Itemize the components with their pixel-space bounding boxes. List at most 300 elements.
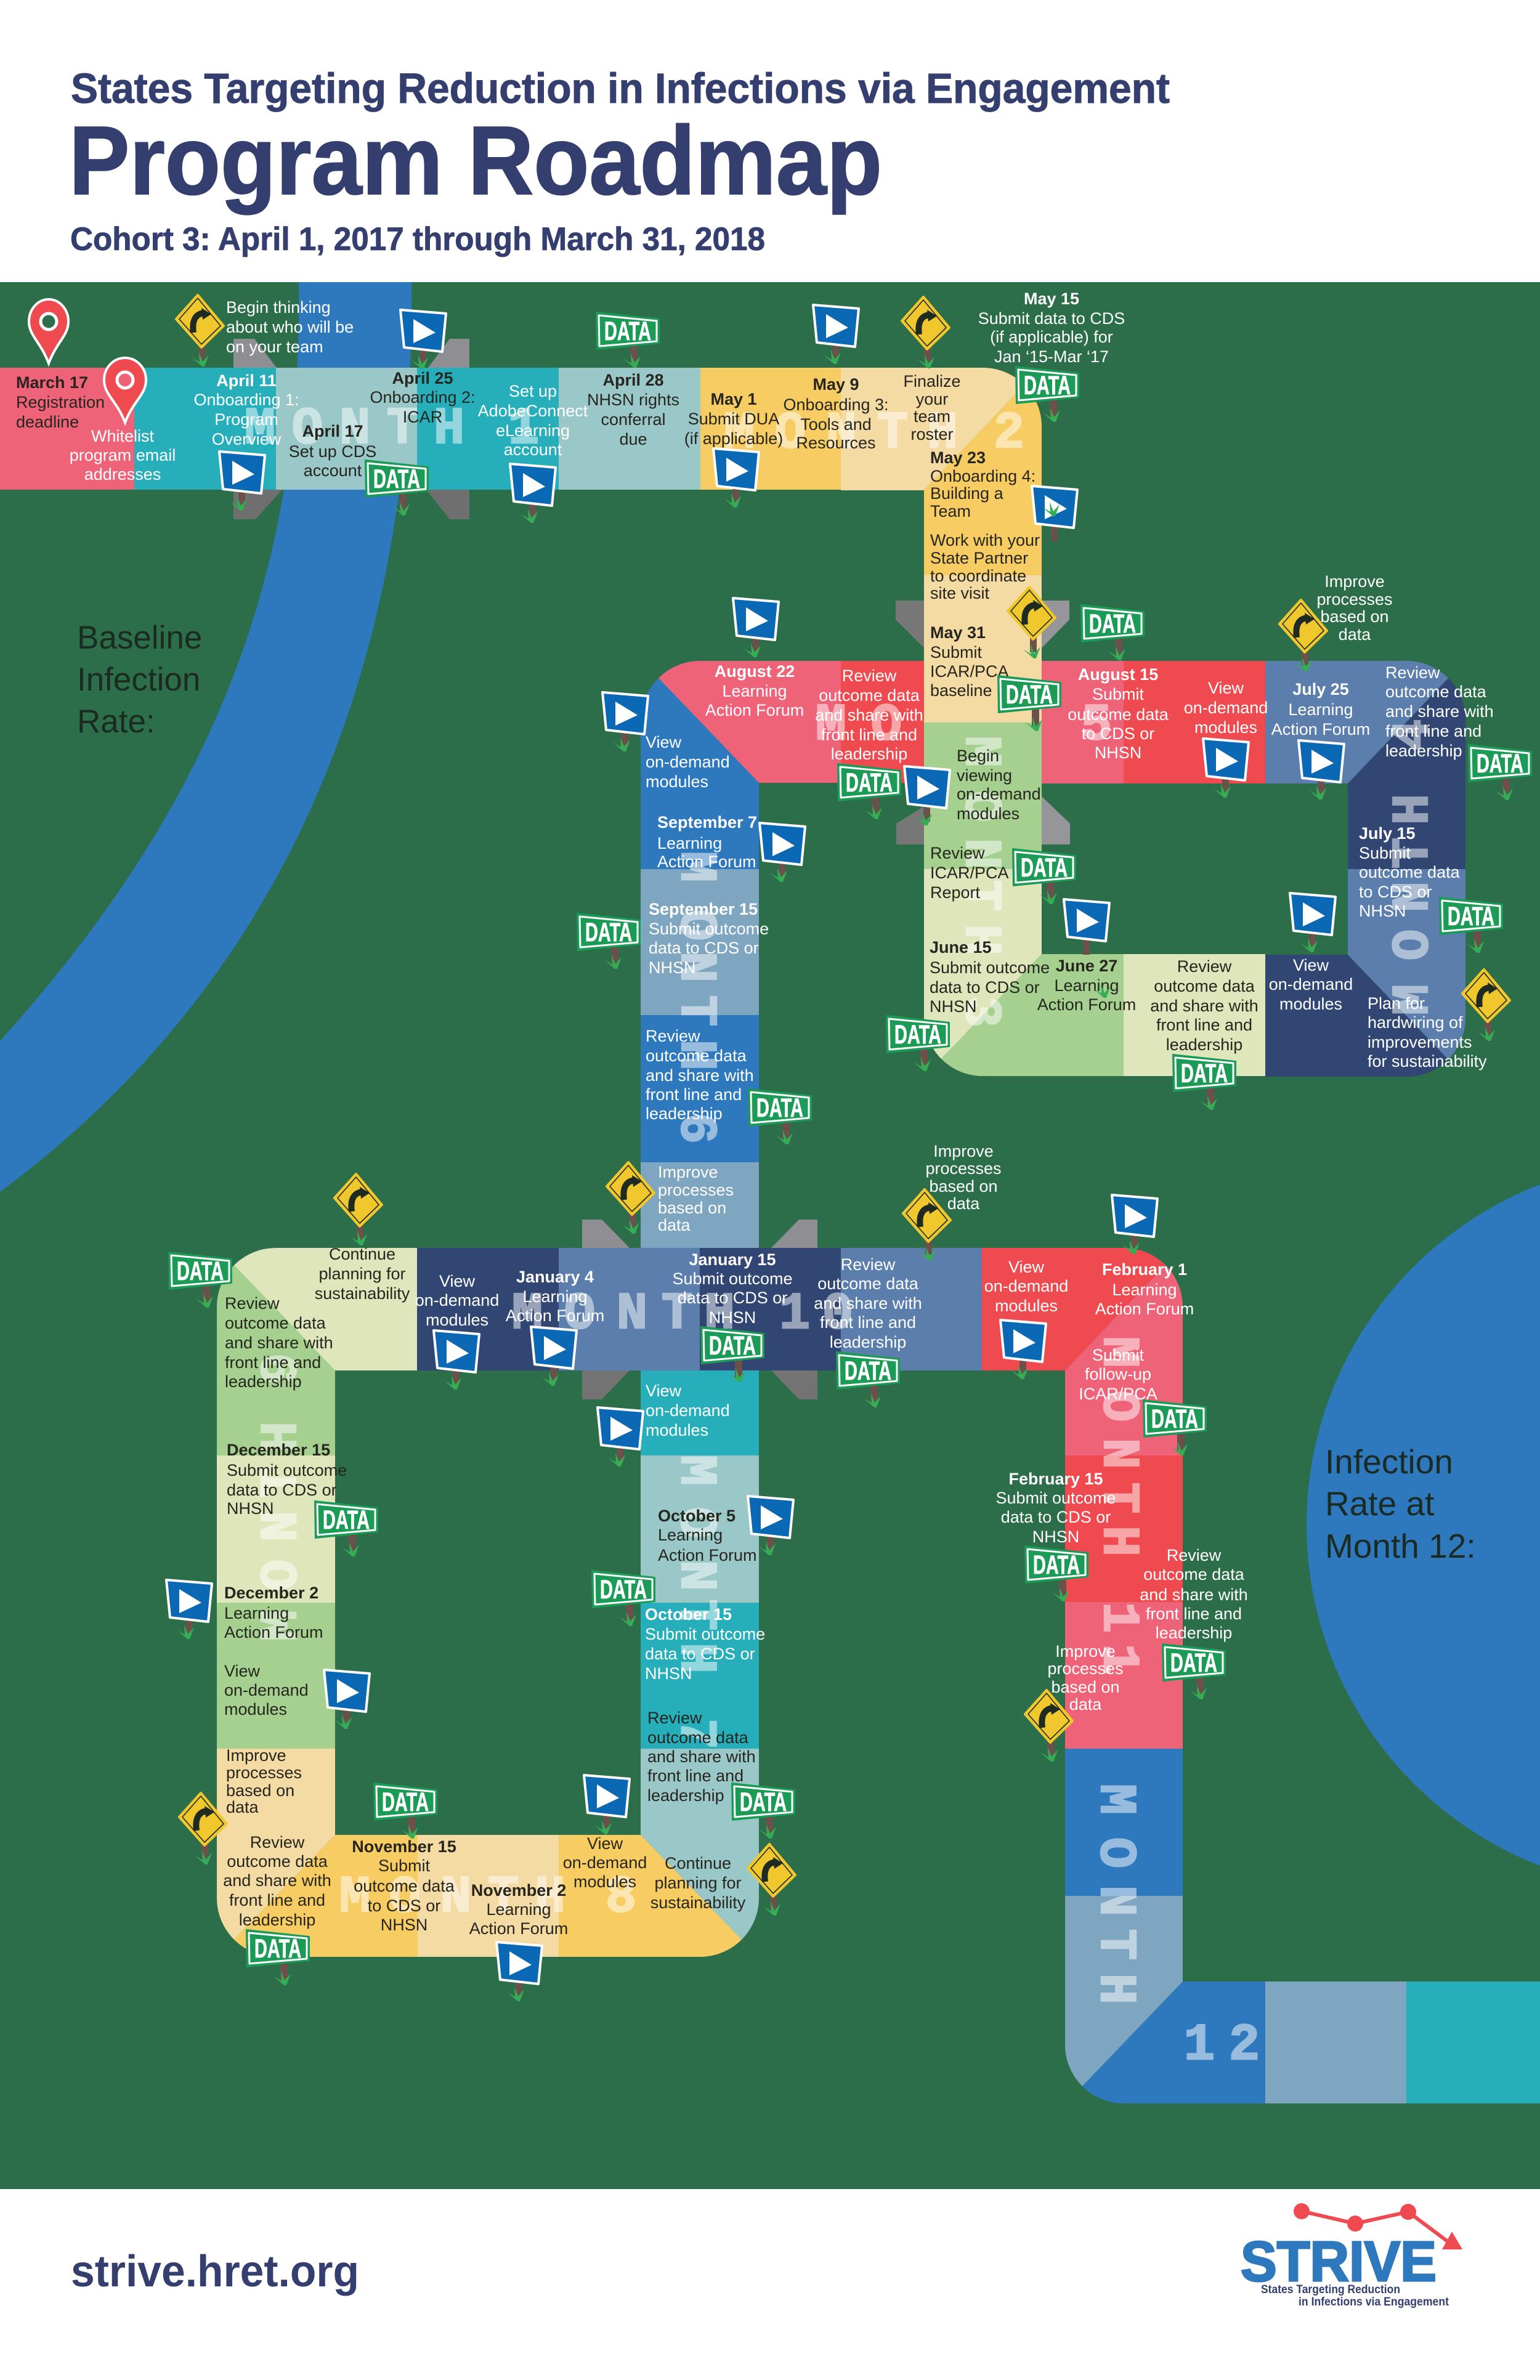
step: May 23: State Partner	[930, 549, 1028, 567]
step: improve processes February: Improve	[1055, 1642, 1116, 1661]
icon: data sign 6	[1469, 745, 1531, 800]
step: improve processes January: data	[947, 1194, 980, 1213]
icon: data sign 15: DATA	[709, 1331, 756, 1361]
river: baseline arc	[0, 282, 411, 1192]
step: review June: leadership	[1166, 1035, 1242, 1054]
step: view modules August: modules	[1194, 718, 1257, 737]
step: improve processes July: processes	[1316, 590, 1393, 609]
label: month 3: MONTH3	[950, 736, 1009, 1027]
label: month 10: MONTH10	[512, 1285, 853, 1344]
step: continue planning October: Continue	[665, 1854, 731, 1872]
step: January 4: Learning	[522, 1287, 588, 1306]
step: May 23: Team	[930, 502, 971, 520]
step: October 15: Submit outcome	[645, 1625, 765, 1643]
step: improve processes July: based on	[1320, 607, 1389, 626]
step: review June: front line and	[1156, 1016, 1252, 1034]
step: view modules February: on-demand	[984, 1277, 1068, 1295]
step: review December: front line and	[225, 1353, 321, 1372]
step: March 17: deadline	[16, 413, 79, 431]
step: July 15: July 15	[1359, 824, 1416, 843]
text: infection rate at month 12: Rate at	[1325, 1484, 1434, 1523]
step: review February: front line and	[1146, 1605, 1242, 1623]
icon: data sign 22	[374, 1783, 437, 1839]
step: view modules October: on-demand	[646, 1401, 730, 1420]
step: November 2: Action Forum	[469, 1919, 568, 1938]
step: March 17: Registration	[16, 393, 105, 411]
step: view modules November: on-demand	[563, 1853, 647, 1872]
step: April 17: Set up CDS	[289, 442, 376, 461]
step: review September: leadership	[646, 1104, 723, 1123]
step: June 15: NHSN	[930, 997, 977, 1016]
step: January 4: January 4	[516, 1268, 594, 1286]
step: July 15: outcome data	[1359, 863, 1461, 881]
step: July 25: July 25	[1292, 680, 1349, 698]
step: January 15: data to CDS or	[678, 1289, 787, 1307]
step: begin thinking: on your team	[226, 338, 323, 356]
text: infection rate at month 12: Month 12:	[1325, 1527, 1476, 1565]
step: review report: Report	[930, 883, 981, 902]
step: whitelist: Whitelist	[91, 427, 155, 445]
step: improve processes September: processes	[658, 1181, 734, 1199]
footer: website url: strive.hret.org	[71, 2247, 359, 2296]
step: September 15: Submit outcome	[649, 920, 769, 938]
text: baseline infection rate: Infection	[77, 662, 200, 698]
step: May 9: Tools and	[800, 415, 872, 434]
step: improve processes November: Improve	[226, 1746, 286, 1765]
step: April 28: conferral	[601, 410, 666, 429]
step: May 9: May 9	[813, 375, 859, 394]
step: December 15: Submit outcome	[227, 1461, 347, 1479]
logo tagline: States Targeting Reduction	[1261, 2283, 1400, 2296]
step: February 15: Submit outcome	[995, 1489, 1116, 1507]
icon: data sign 21	[1162, 1644, 1225, 1699]
icon: data sign 14	[169, 1252, 232, 1308]
icon: data sign 14: DATA	[177, 1257, 224, 1286]
step: review report: ICAR/PCA	[930, 864, 1009, 882]
step: December 15: data to CDS or	[227, 1481, 337, 1499]
step: continue planning October: sustainability	[650, 1893, 746, 1912]
step: improve processes November: data	[226, 1798, 259, 1816]
step: review July: outcome data	[1385, 682, 1487, 701]
icon: data sign 9	[1440, 897, 1502, 953]
step: review October: outcome data	[647, 1728, 749, 1747]
step: July 25: Learning	[1288, 700, 1353, 719]
label: month 9: MONTH9	[253, 1353, 312, 1641]
step: plan for hardwiring: for sustainability	[1368, 1052, 1487, 1071]
icon: data sign 4: DATA	[1006, 680, 1053, 710]
step: improve processes February: based on	[1051, 1678, 1120, 1696]
step: review January: leadership	[830, 1333, 906, 1351]
step: May 1: May 1	[710, 390, 757, 408]
step: whitelist: addresses	[84, 465, 161, 484]
step: review November: and share with	[223, 1871, 331, 1890]
icon: data sign 21: DATA	[1170, 1648, 1217, 1678]
step: May 23: Onboarding 4:	[930, 467, 1035, 485]
step: view modules November: modules	[573, 1872, 636, 1891]
step: July 15: to CDS or	[1359, 883, 1432, 901]
step: view modules February: View	[1008, 1258, 1045, 1276]
step: April 11: Overview	[212, 430, 282, 448]
label: month 6: MONTH6	[666, 851, 724, 1144]
icon: data sign 4	[998, 676, 1061, 731]
step: May 15: May 15	[1024, 289, 1079, 308]
step: review October: front line and	[647, 1767, 744, 1785]
icon: data sign 24: DATA	[254, 1934, 301, 1964]
icon: data sign 12	[1173, 1054, 1236, 1110]
step: review December: leadership	[225, 1372, 302, 1391]
step: review October: and share with	[647, 1747, 756, 1766]
text: infection rate at month 12: Infection	[1325, 1443, 1453, 1481]
step: June 15: June 15	[930, 938, 992, 957]
step: April 25: April 25	[392, 369, 453, 387]
step: review November: outcome data	[227, 1852, 328, 1871]
step: October 5: October 5	[658, 1507, 736, 1525]
step: review November: Review	[250, 1833, 305, 1852]
icon: data sign 15	[701, 1327, 764, 1382]
step: December 2: Action Forum	[224, 1623, 323, 1641]
step: continue planning October: planning for	[654, 1874, 742, 1892]
step: November 15: to CDS or	[368, 1896, 440, 1915]
step: August 22: August 22	[715, 662, 795, 681]
step: review January: Review	[841, 1255, 896, 1274]
icon: location pin whitelist	[104, 358, 146, 423]
label: month 11: MONTH11	[1088, 1337, 1147, 1675]
icon: data sign 20: DATA	[1033, 1550, 1080, 1580]
step: review July: and share with	[1385, 702, 1494, 721]
step: May 15: Submit data to CDS	[978, 309, 1125, 328]
step: review August: Review	[842, 666, 897, 685]
icon: data sign 24	[246, 1930, 309, 1985]
step: April 11: April 11	[216, 371, 277, 390]
step: June 27: Action Forum	[1037, 995, 1136, 1014]
icon: data sign 23	[732, 1783, 795, 1839]
step: continue planning January: sustainability	[315, 1284, 410, 1303]
icon: data sign 16: DATA	[845, 1356, 891, 1386]
step: May 9: Onboarding 3:	[783, 395, 889, 414]
step: May 23: May 23	[930, 448, 986, 467]
step: June 27: June 27	[1056, 957, 1117, 975]
step: improve processes July: Improve	[1324, 572, 1385, 591]
icon: data sign 1: DATA	[373, 464, 420, 494]
step: September 15: September 15	[649, 900, 758, 918]
label: month 12 number: 12	[1184, 2017, 1260, 2075]
logo tagline: in Infections via Engagement	[1299, 2296, 1449, 2309]
step: review February: leadership	[1156, 1624, 1232, 1642]
step: review August: and share with	[815, 706, 923, 724]
step: review June: outcome data	[1154, 977, 1255, 995]
step: view modules August: on-demand	[1184, 698, 1268, 717]
step: whitelist: program email	[70, 446, 176, 464]
step: May 15: Jan ‘15-Mar ‘17	[994, 347, 1109, 366]
step: review September: Review	[646, 1027, 700, 1045]
step: February 15: data to CDS or	[1001, 1508, 1111, 1526]
step: review September: and share with	[646, 1066, 754, 1085]
icons: video module signs	[166, 305, 1344, 2001]
step: August 15: Submit	[1092, 685, 1145, 703]
icon: data sign 13	[748, 1089, 811, 1144]
step: begin thinking: about who will be	[226, 318, 354, 336]
logo trend line with arrow	[1294, 2203, 1462, 2249]
step: February 1: Action Forum	[1095, 1300, 1194, 1318]
step: improve processes January: processes	[925, 1159, 1002, 1178]
step: August 22: Learning	[722, 682, 787, 700]
circle: infection rate at month 12	[1307, 1160, 1540, 1890]
step: May 1: Submit DUA	[688, 410, 779, 428]
road: twelve month path	[0, 368, 1540, 2103]
icon: data sign 1	[365, 460, 428, 516]
step: review February: outcome data	[1143, 1565, 1245, 1584]
step: September 7: Learning	[657, 834, 722, 852]
step: review January: outcome data	[817, 1274, 919, 1293]
step: October 15: October 15	[645, 1605, 732, 1624]
icon: data sign 13: DATA	[756, 1093, 803, 1123]
step: improve processes September: data	[658, 1216, 691, 1234]
step: review June: and share with	[1150, 997, 1258, 1015]
step: January 15: January 15	[689, 1250, 776, 1269]
step: November 2: Learning	[486, 1900, 551, 1919]
step: June 15: Submit outcome	[930, 958, 1050, 977]
step: begin viewing: modules	[957, 804, 1019, 823]
step: view modules September: modules	[646, 772, 708, 791]
step: April 28: due	[619, 430, 647, 448]
step: March 17: March 17	[16, 373, 88, 392]
step: improve processes July: data	[1339, 625, 1371, 644]
step: January 4: Action Forum	[506, 1306, 604, 1325]
text: baseline infection rate: Rate:	[77, 703, 155, 740]
step: review September: outcome data	[646, 1046, 747, 1065]
icon: data sign 19	[592, 1571, 655, 1626]
step: review August: outcome data	[819, 686, 920, 705]
step: October 5: Learning	[658, 1526, 723, 1544]
icon: data sign 17	[315, 1501, 378, 1556]
icon: data sign 11	[886, 1016, 949, 1071]
step: January 15: Submit outcome	[672, 1269, 793, 1288]
step: May 1: (if applicable)	[684, 429, 783, 448]
step: February 1: Learning	[1112, 1281, 1177, 1299]
icon: data sign 9: DATA	[1448, 902, 1494, 931]
icon: data sign 11: DATA	[894, 1020, 941, 1050]
step: continue planning January: planning for	[318, 1265, 406, 1283]
step: November 15: outcome data	[354, 1877, 455, 1895]
step: review report: Review	[930, 844, 985, 862]
step: November 15: Submit	[378, 1856, 431, 1875]
step: begin viewing: Begin	[957, 747, 999, 765]
step: February 15: NHSN	[1032, 1528, 1079, 1546]
icon: data sign 17: DATA	[323, 1505, 370, 1535]
step: begin thinking: Begin thinking	[226, 298, 331, 317]
step: finalize roster: roster	[910, 425, 954, 443]
heading: cohort dates: Cohort 3: April 1, 2017 through March 31, 2018	[70, 221, 765, 257]
icon: data sign 19: DATA	[600, 1575, 647, 1605]
step: April 28: NHSN rights	[587, 391, 679, 409]
step: review October: leadership	[647, 1786, 724, 1805]
step: review February: Review	[1167, 1546, 1222, 1564]
step: view modules September: on-demand	[646, 753, 730, 771]
step: begin viewing: on-demand	[957, 785, 1041, 803]
step: improve processes September: Improve	[658, 1163, 718, 1181]
step: continue planning January: Continue	[329, 1245, 395, 1263]
step: May 15: (if applicable) for	[990, 328, 1113, 346]
step: review December: Review	[225, 1294, 280, 1313]
logo tagline	[1261, 2283, 1449, 2309]
step: view modules October: modules	[646, 1421, 708, 1439]
step: plan for hardwiring: improvements	[1368, 1033, 1472, 1051]
step: improve processes November: based on	[226, 1781, 294, 1800]
step: AdobeConnect: AdobeConnect	[478, 402, 588, 420]
step: December 15: December 15	[227, 1441, 330, 1459]
step: October 5: Action Forum	[658, 1546, 757, 1564]
icon: data sign 18: DATA	[1151, 1404, 1198, 1434]
step: July 15: Submit	[1359, 844, 1411, 862]
step: view modules January: on-demand	[415, 1291, 499, 1309]
step: June 27: Learning	[1054, 976, 1119, 995]
step: November 15: November 15	[352, 1837, 456, 1856]
step: May 31: May 31	[930, 623, 986, 642]
step: August 15: outcome data	[1068, 705, 1169, 724]
icon: data sign 23: DATA	[740, 1787, 787, 1817]
step: view modules July: on-demand	[1269, 975, 1353, 994]
step: November 15: NHSN	[381, 1916, 428, 1934]
icon: data sign 7	[838, 764, 901, 819]
icon: data sign 8: DATA	[1021, 853, 1068, 883]
step: submit follow-up: follow-up	[1085, 1365, 1151, 1383]
step: view modules July: modules	[1279, 995, 1342, 1013]
icon: data sign 5	[1081, 605, 1144, 660]
icon: location pin start	[29, 299, 68, 363]
step: plan for hardwiring: Plan for	[1368, 994, 1425, 1013]
step: May 9: Resources	[796, 434, 876, 452]
step: review December: outcome data	[225, 1314, 326, 1332]
step: view modules February: modules	[995, 1297, 1058, 1315]
step: finalize roster: team	[914, 407, 950, 426]
step: AdobeConnect: eLearning	[496, 421, 570, 440]
step: review July: leadership	[1385, 742, 1462, 760]
step: September 7: Action Forum	[657, 852, 756, 871]
icon: data sign 20	[1025, 1546, 1088, 1601]
step: begin viewing: viewing	[957, 766, 1012, 785]
step: review July: Review	[1385, 663, 1440, 682]
step: May 23: to coordinate	[930, 567, 1026, 585]
label: month 1: MONTH1	[245, 400, 539, 459]
step: December 2: December 2	[224, 1584, 318, 1602]
step: view modules December: on-demand	[224, 1681, 309, 1699]
step: February 15: February 15	[1008, 1470, 1103, 1488]
icons: yellow turn signs	[176, 295, 1510, 1916]
step: review November: leadership	[239, 1911, 315, 1929]
step: September 15: NHSN	[649, 958, 696, 977]
step: April 25: ICAR	[403, 408, 442, 426]
step: June 15: data to CDS or	[930, 978, 1040, 997]
icon: data sign 2: DATA	[604, 317, 651, 346]
step: view modules January: View	[439, 1272, 476, 1290]
step: finalize roster: your	[916, 390, 948, 408]
step: review December: and share with	[225, 1334, 333, 1352]
step: submit follow-up: Submit	[1092, 1346, 1145, 1364]
heading: program full name: States Targeting Reduction in Infections via Engagement	[71, 65, 1170, 112]
step: April 25: Onboarding 2:	[370, 388, 476, 407]
icon: data sign 12: DATA	[1181, 1059, 1228, 1088]
label: month 5 number: 5	[1081, 697, 1112, 755]
step: improve processes January: based on	[929, 1177, 998, 1196]
step: April 17: account	[304, 461, 362, 480]
step: view modules November: View	[587, 1834, 623, 1853]
step: October 15: NHSN	[645, 1664, 692, 1683]
step: review January: and share with	[814, 1294, 922, 1313]
step: May 23: site visit	[930, 584, 990, 602]
heading: Program Roadmap: Program Roadmap	[69, 107, 882, 215]
step: view modules October: View	[646, 1382, 682, 1400]
overpass supports: gray shadows	[233, 339, 1070, 1399]
step: view modules September: View	[646, 733, 682, 751]
icon: data sign 10	[577, 913, 640, 969]
step: December 2: Learning	[224, 1604, 289, 1622]
title block	[69, 65, 1170, 257]
step: improve processes February: processes	[1047, 1659, 1124, 1678]
step: May 31: Submit	[930, 643, 983, 662]
step: April 17: April 17	[302, 422, 363, 440]
step: review August: leadership	[831, 745, 907, 763]
text: baseline infection rate: Baseline	[77, 620, 202, 656]
label: month 5 start: MO	[816, 697, 902, 755]
step: finalize roster: Finalize	[903, 372, 961, 391]
label: month 2: MONTH2	[724, 405, 1024, 463]
step: October 15: data to CDS or	[645, 1645, 755, 1663]
logo: STRIVE	[1241, 2203, 1462, 2309]
step: review November: front line and	[229, 1891, 325, 1909]
step: September 15: data to CDS or	[649, 939, 759, 957]
step: improve processes February: data	[1069, 1695, 1102, 1714]
step: AdobeConnect: Set up	[509, 382, 557, 400]
step: August 15: August 15	[1078, 665, 1158, 684]
icon: data sign 5: DATA	[1089, 609, 1136, 639]
step: plan for hardwiring: hardwiring of	[1368, 1013, 1463, 1032]
icon: data sign 18	[1143, 1400, 1206, 1455]
step: November 2: November 2	[471, 1881, 566, 1900]
label: month 7: MONTH7	[666, 1455, 724, 1749]
step: review August: front line and	[821, 726, 917, 744]
logo wordmark: STRIVE	[1241, 2230, 1437, 2293]
label: month 12 word: MONTH	[1085, 1784, 1144, 2004]
step: January 15: NHSN	[709, 1308, 756, 1327]
label: month 8: MONTH8	[339, 1869, 636, 1927]
step: April 28: April 28	[602, 371, 664, 389]
step: December 15: NHSN	[227, 1499, 274, 1518]
step: review February: and share with	[1140, 1585, 1248, 1604]
step: review July: front line and	[1385, 722, 1481, 740]
icon: data sign 3	[1016, 366, 1079, 422]
step: view modules December: modules	[224, 1700, 287, 1718]
step: view modules August: View	[1208, 679, 1244, 697]
step: May 23: Building a	[930, 484, 1004, 503]
step: August 22: Action Forum	[705, 701, 804, 719]
icon: data sign 3: DATA	[1024, 371, 1071, 400]
step: review October: Review	[647, 1709, 702, 1727]
icon: data sign 7: DATA	[846, 768, 893, 798]
step: review June: Review	[1177, 957, 1232, 976]
step: February 1: February 1	[1102, 1260, 1187, 1279]
step: July 25: Action Forum	[1271, 720, 1370, 739]
step: May 23: Work with your	[930, 531, 1040, 549]
step: August 15: NHSN	[1095, 743, 1141, 762]
icon: data sign 16	[837, 1352, 899, 1407]
step: improve processes November: processes	[226, 1763, 302, 1782]
step: July 15: NHSN	[1359, 902, 1406, 920]
step: review January: front line and	[820, 1313, 916, 1332]
step: August 15: to CDS or	[1082, 724, 1154, 743]
step: submit follow-up: ICAR/PCA	[1079, 1385, 1157, 1403]
step: September 7: September 7	[657, 813, 757, 832]
step: April 11: Onboarding 1:	[193, 391, 299, 409]
